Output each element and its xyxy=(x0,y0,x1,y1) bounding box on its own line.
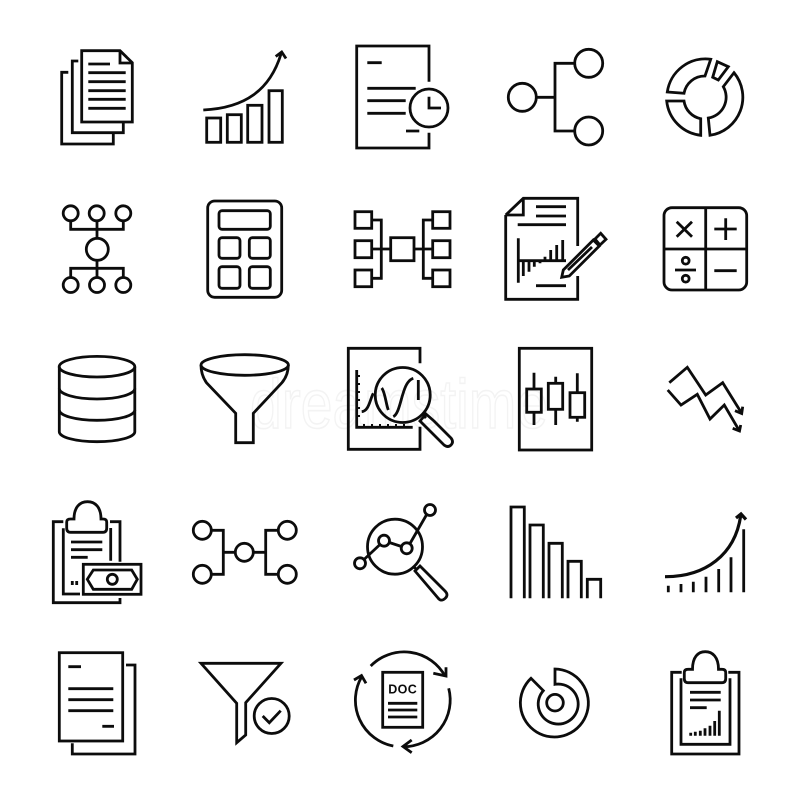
icon: clipboard with banknote xyxy=(53,502,141,603)
icon: funnel xyxy=(201,355,288,443)
icon: descending bars xyxy=(511,507,601,598)
icon: document with cycle arrows xyxy=(354,652,450,753)
icon: database xyxy=(59,356,135,442)
icon: calculator xyxy=(208,201,282,297)
icon: stacked documents xyxy=(62,51,132,144)
icon: growth curve with small bars xyxy=(665,514,746,592)
icon: candlestick chart page xyxy=(519,348,592,450)
watermark: dreamstime xyxy=(250,365,548,443)
icon: falling zigzag arrows xyxy=(668,367,743,431)
icon: two text pages xyxy=(59,653,135,754)
icon: magnifier over line chart xyxy=(354,504,447,600)
icon: node diagram with center hub xyxy=(193,521,296,583)
DOC label: DOC xyxy=(388,682,417,696)
icon: document with clock xyxy=(357,46,448,148)
icon: clipboard with bar chart xyxy=(672,652,739,754)
icon: rising bar chart with arrow xyxy=(203,52,286,142)
icon: branching tree of three nodes xyxy=(508,49,603,145)
icon: ring chart with gap xyxy=(520,669,588,737)
icon: flow diagram with square nodes xyxy=(355,212,450,287)
icon: segmented donut chart xyxy=(667,59,743,135)
icon: math operators xyxy=(664,208,747,290)
icon: hub with six circular nodes xyxy=(63,206,131,292)
icon: chart document with magnifier xyxy=(348,348,452,449)
icon: report with chart and pencil xyxy=(506,198,606,299)
icon: funnel with check mark xyxy=(201,663,289,743)
